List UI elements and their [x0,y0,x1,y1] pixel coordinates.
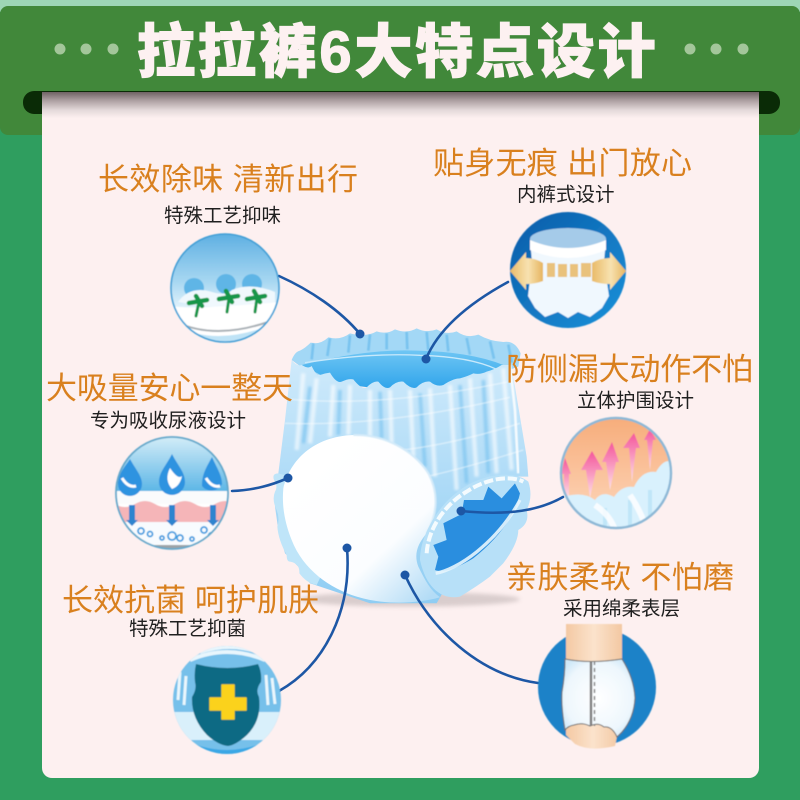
diaper body [275,360,528,603]
subheading: 专为吸收尿液设计 [90,410,246,432]
feature: absorption [46,371,293,551]
header band [0,6,800,135]
paper panel [42,92,759,778]
icon: rising pink arrows [560,418,672,530]
feature: leak guard [506,352,753,530]
line 4 [461,497,563,513]
feature: soft surface [506,560,734,749]
heading: 贴身无痕 出门放心 [433,146,692,181]
leg opening [420,475,530,597]
side seam [510,365,518,473]
heading: 长效除味 清新出行 [98,162,358,197]
subheading: 采用绵柔表层 [563,598,680,620]
line 6 [405,575,538,683]
icon: briefs with stretch arrows [510,212,626,328]
product: pull-up diaper [273,328,530,607]
subheading: 内裤式设计 [517,184,615,206]
heading: 大吸量安心一整天 [46,371,293,406]
inner opening [302,350,503,392]
absorbent pad [283,435,440,603]
subheading: 特殊工艺抑味 [164,205,281,227]
back pleats [312,332,512,363]
subheading: 立体护围设计 [577,390,694,412]
line 1 [279,276,360,334]
back waistband [292,328,521,390]
feature: antibacterial [62,583,319,756]
icon: cotton leaves [170,234,280,345]
line 2 [426,282,508,359]
heading: 亲肤柔软 不怕磨 [506,560,734,595]
feature: underwear fit [433,146,692,328]
header dots right [684,44,748,54]
body pleats [297,368,512,490]
heading: 长效抗菌 呵护肌肤 [62,583,319,618]
line 3 [232,478,288,491]
line 5 [279,548,348,691]
connector dots [284,330,466,580]
subheading: 特殊工艺抑菌 [129,618,246,640]
header dots left [54,44,118,54]
icon: shield with cross [173,646,281,756]
title: 拉拉裤6大特点设计 [137,20,658,85]
icon: water drops and layers [115,436,235,551]
ground shadow [300,592,520,607]
feature: odor control [98,162,358,345]
heading: 防侧漏大动作不怕 [506,352,753,387]
icon: soft brief on body [538,624,656,749]
slot [23,91,780,114]
connector lines [232,276,563,691]
